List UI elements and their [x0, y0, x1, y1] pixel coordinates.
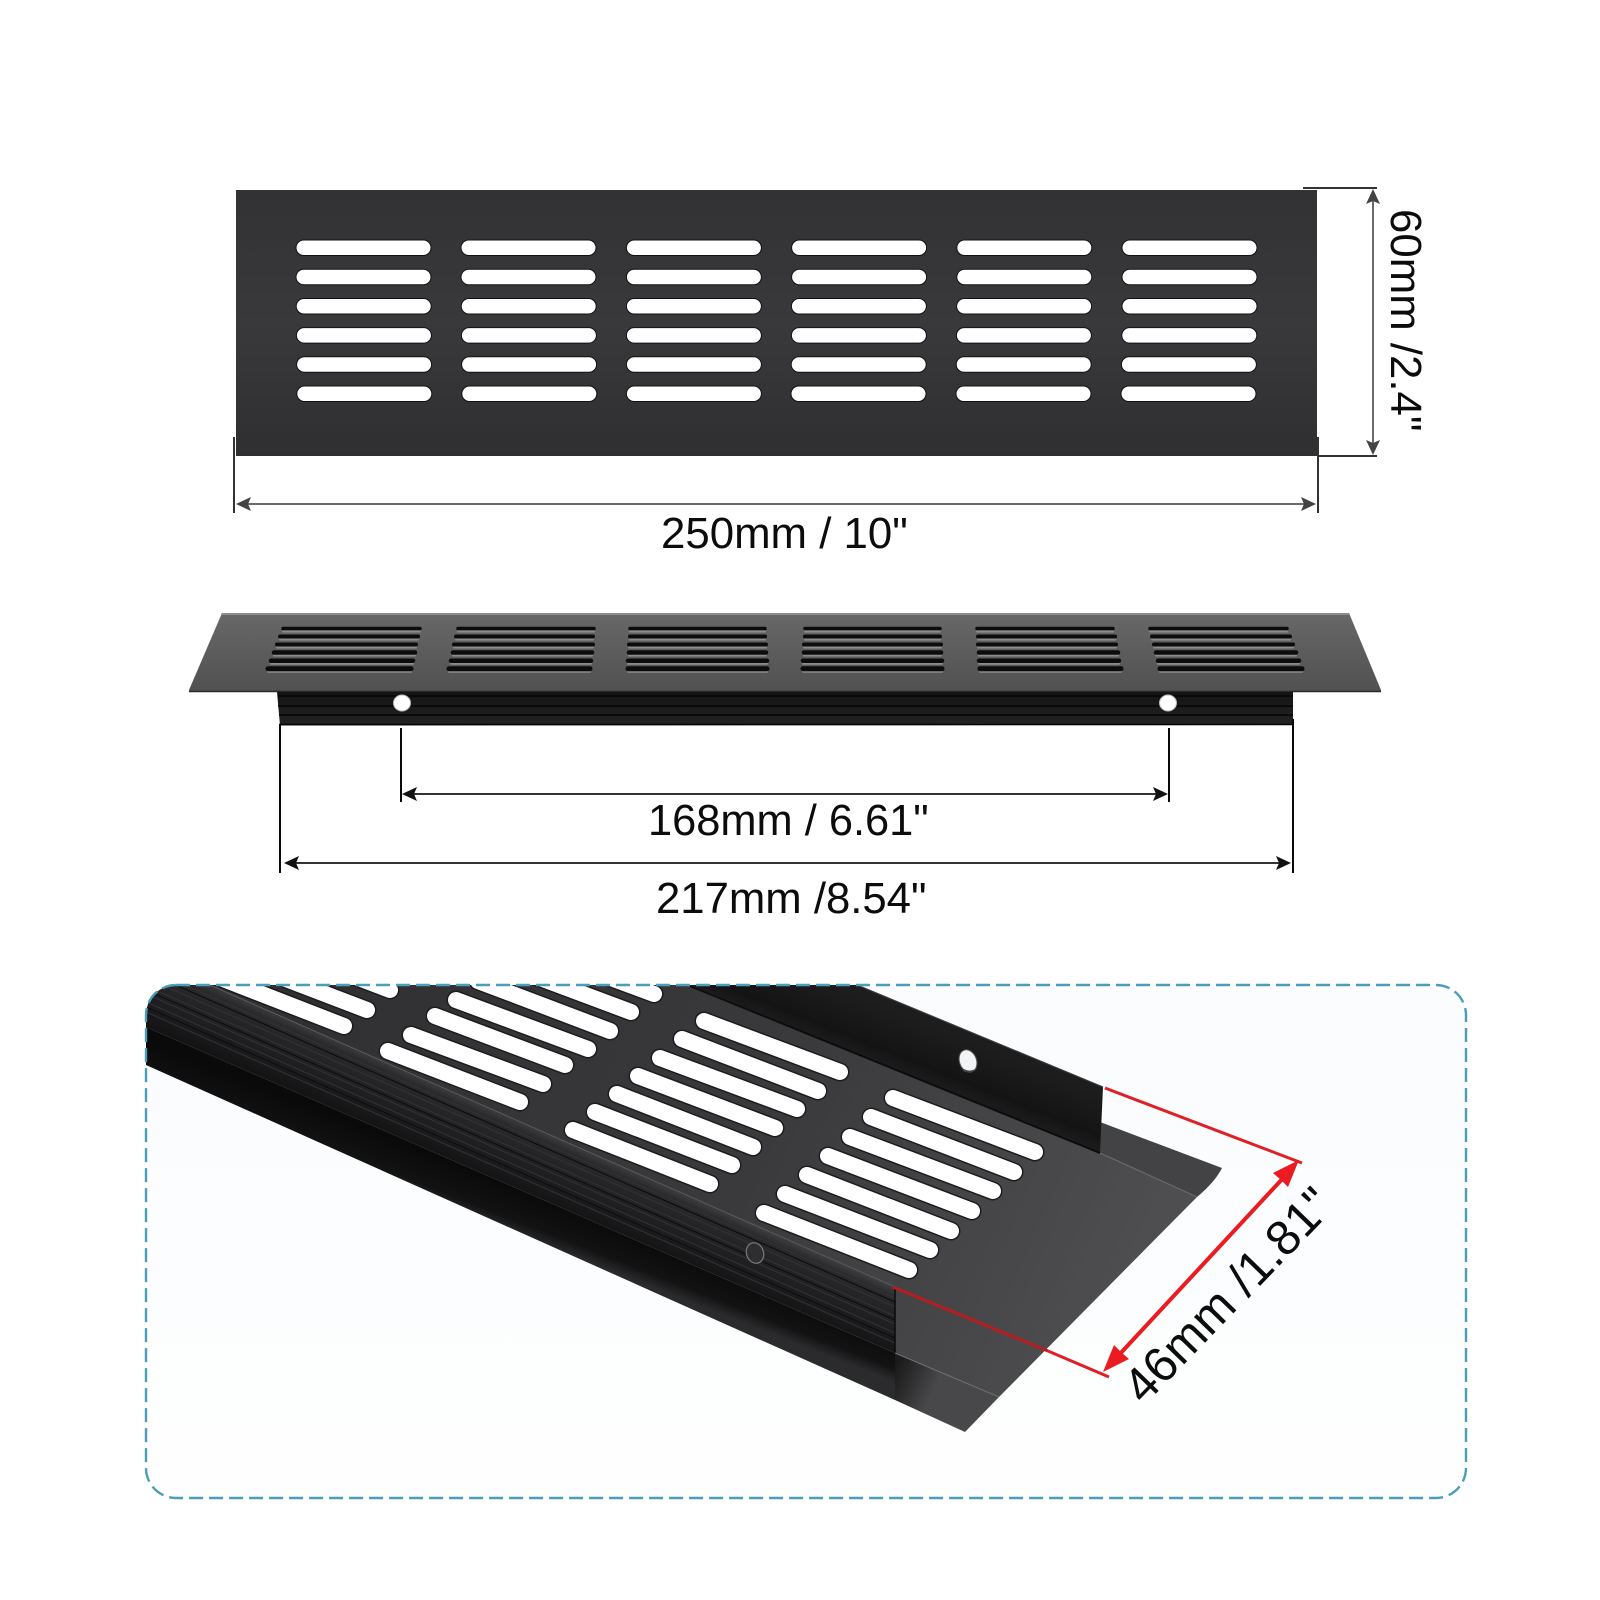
vent plate, perspective — [189, 613, 1381, 692]
dashed panel border — [146, 985, 1466, 1498]
dimension: height 60mm — [1303, 188, 1430, 456]
channel with grooves — [277, 692, 1293, 726]
dimension: channel length 217mm — [280, 719, 1293, 923]
main plate — [210, 985, 1197, 1397]
dimension: depth 46mm — [893, 1088, 1344, 1414]
panel: close-up with dashed border — [146, 935, 1466, 1498]
slots, perspective — [268, 628, 1302, 672]
rear flange — [1100, 1122, 1222, 1197]
vent plate, top view — [236, 190, 1317, 456]
dimension: width 250mm — [234, 437, 1318, 558]
slots, top view — [296, 240, 1257, 402]
dimension: hole spacing 168mm — [401, 728, 1169, 845]
panel: front perspective view — [189, 613, 1381, 923]
crease lines on flange — [1100, 1153, 1197, 1197]
panel: top view product — [234, 188, 1430, 558]
dimension: channel length 217mm: 217mm /8.54" — [656, 874, 926, 923]
dimension: width 250mm: 250mm / 10" — [661, 509, 908, 558]
lower strip — [146, 1027, 895, 1400]
close-up vent product — [146, 985, 1222, 1432]
dimension: height 60mm: 60mm /2.4" — [1381, 209, 1430, 431]
panel background — [146, 985, 1466, 1498]
dimension: hole spacing 168mm: 168mm / 6.61" — [648, 797, 929, 845]
near channel with grooves — [146, 957, 895, 1353]
dimension: depth 46mm: 46mm /1.81" — [1113, 1177, 1344, 1414]
slots, close-up — [213, 985, 1044, 1280]
icon: mounting holes — [394, 695, 1176, 711]
rear wall with hole — [690, 985, 1103, 1153]
front flange — [895, 1353, 999, 1432]
